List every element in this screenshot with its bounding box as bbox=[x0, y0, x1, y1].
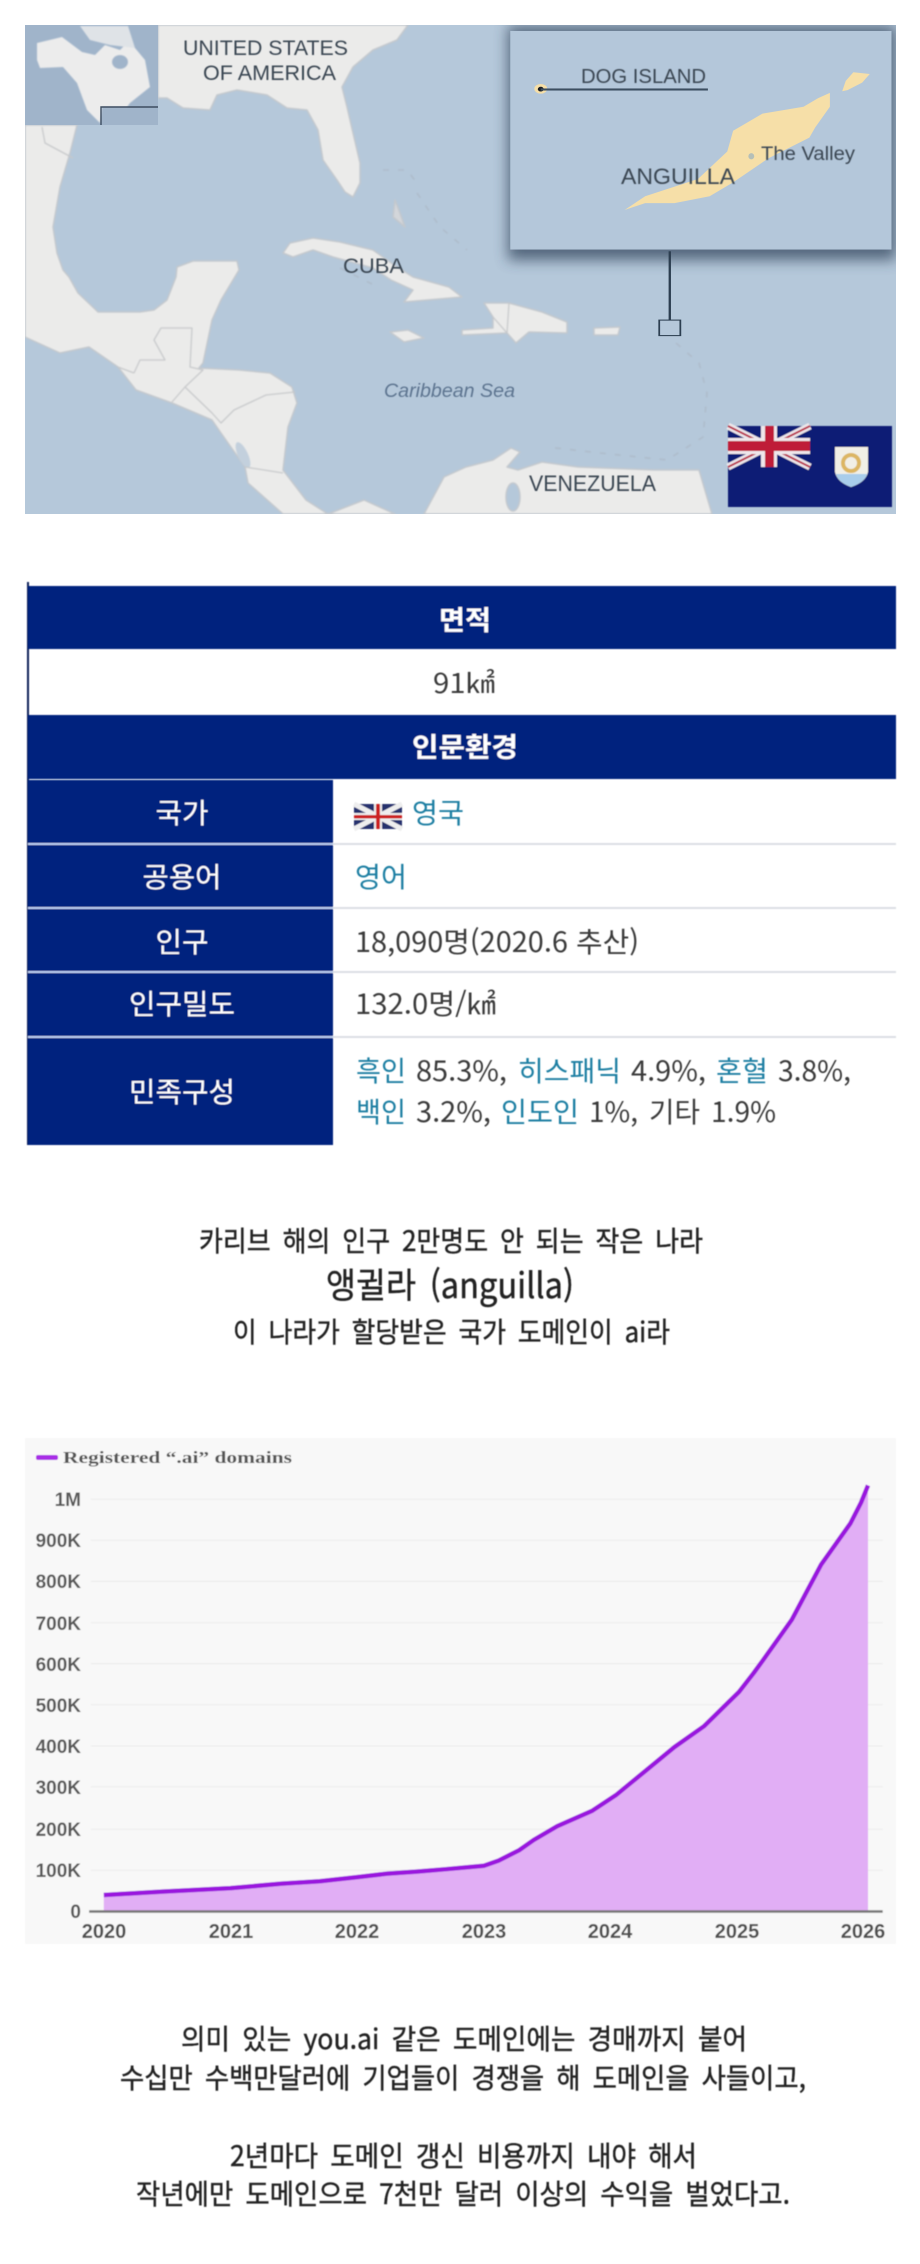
map labels: The Valley bbox=[761, 144, 856, 165]
row: population density: 132.0명/㎢ bbox=[355, 983, 496, 1023]
land masses bbox=[25, 25, 712, 514]
legend: Registered “.ai” domains bbox=[63, 1448, 292, 1467]
inset: Anguilla detail bbox=[510, 31, 891, 336]
x axis labels: 2024 bbox=[588, 1921, 633, 1943]
x axis labels: 2021 bbox=[209, 1921, 253, 1943]
row: ethnic composition: 85.3%, bbox=[416, 1050, 507, 1090]
row: ethnic composition bbox=[28, 1038, 851, 1145]
y axis labels: 600K bbox=[36, 1655, 81, 1676]
row: ethnic composition: 4.9%, bbox=[631, 1050, 706, 1090]
row: population density: 인구밀도 bbox=[129, 983, 235, 1023]
y axis labels: 200K bbox=[36, 1820, 81, 1841]
row: population bbox=[28, 909, 639, 971]
row: ethnic composition: 혼혈 bbox=[716, 1050, 768, 1090]
text block: closing caption: 2년마다 도메인 갱신 비용까지 내야 해서 bbox=[230, 2135, 697, 2175]
grid lines and area bbox=[89, 1485, 883, 1912]
map labels: ANGUILLA bbox=[621, 164, 735, 189]
map labels bbox=[183, 37, 856, 496]
heading: area: 면적 bbox=[439, 599, 491, 638]
text block: intro caption: 앵귈라 (anguilla) bbox=[326, 1258, 574, 1309]
row: ethnic composition: 흑인 bbox=[356, 1050, 406, 1090]
row: ethnic composition: 히스패닉 bbox=[518, 1050, 621, 1090]
x axis labels: 2026 bbox=[841, 1921, 885, 1943]
row: official language: 공용어 bbox=[142, 856, 222, 896]
y axis labels: 1M bbox=[55, 1490, 81, 1511]
x axis labels: 2022 bbox=[335, 1921, 379, 1943]
y axis labels bbox=[36, 1490, 81, 1923]
row: ethnic composition: 3.2%, bbox=[416, 1091, 491, 1131]
row: ethnic composition: 민족구성 bbox=[129, 1071, 235, 1111]
map labels: OF AMERICA bbox=[203, 62, 336, 85]
row: ethnic composition: 인도인 bbox=[501, 1091, 579, 1131]
row: ethnic composition: 백인 bbox=[356, 1091, 406, 1131]
map labels: CUBA bbox=[343, 255, 404, 278]
panel: registered .ai domains area chart bbox=[25, 1438, 896, 1944]
row: ethnic composition: 3.8%, bbox=[778, 1050, 851, 1090]
y axis labels: 400K bbox=[36, 1737, 81, 1758]
text block: closing caption: 수십만 수백만달러에 기업들이 경쟁을 해 도메인을 사들이고, bbox=[120, 2057, 806, 2097]
row: official language bbox=[28, 845, 407, 907]
row: population: 18,090명(2020.6 추산) bbox=[355, 921, 639, 961]
map labels: DOG ISLAND bbox=[581, 66, 706, 88]
row: population: 인구 bbox=[156, 921, 208, 961]
panel: facts table bbox=[27, 582, 896, 1145]
table frame rule bbox=[27, 582, 29, 1145]
text block: intro caption: 이 나라가 할당받은 국가 도메인이 ai라 bbox=[233, 1311, 670, 1351]
heading: area bbox=[28, 586, 896, 649]
row: country: 영국 bbox=[412, 792, 464, 832]
heading: human environment: 인문환경 bbox=[412, 726, 518, 765]
x axis labels: 2023 bbox=[462, 1921, 506, 1943]
heading: human environment bbox=[28, 715, 896, 779]
row: official language: 영어 bbox=[355, 856, 407, 896]
row: ethnic composition: 기타 bbox=[649, 1091, 700, 1131]
map labels: VENEZUELA bbox=[529, 471, 656, 496]
panel: map of the Caribbean bbox=[25, 25, 896, 514]
x axis labels bbox=[82, 1921, 885, 1943]
text block: closing caption bbox=[120, 2018, 806, 2213]
icon: Anguilla flag bbox=[728, 426, 892, 507]
row: ethnic composition: 1.9% bbox=[711, 1091, 776, 1131]
y axis labels: 500K bbox=[36, 1696, 81, 1717]
row: ethnic composition: 1%, bbox=[589, 1091, 638, 1131]
map labels: UNITED STATES bbox=[183, 37, 348, 60]
row: country: 국가 bbox=[156, 792, 208, 832]
text block: intro caption bbox=[199, 1220, 703, 1351]
y axis labels: 0 bbox=[70, 1902, 81, 1923]
y axis labels: 700K bbox=[36, 1614, 81, 1635]
y axis labels: 100K bbox=[36, 1861, 81, 1882]
row: population density bbox=[28, 973, 496, 1036]
y axis labels: 300K bbox=[36, 1778, 81, 1799]
text block: intro caption: 카리브 해의 인구 2만명도 안 되는 작은 나라 bbox=[199, 1220, 703, 1260]
text: area value: 91㎢ bbox=[433, 662, 495, 701]
text block: closing caption: 작년에만 도메인으로 7천만 달러 이상의 수익을 벌었다고. bbox=[136, 2173, 790, 2213]
map labels: Caribbean Sea bbox=[384, 381, 515, 402]
inset shadow bbox=[508, 26, 896, 260]
y axis labels: 800K bbox=[36, 1572, 81, 1593]
x axis labels: 2020 bbox=[82, 1921, 126, 1943]
inset: North America locator bbox=[25, 25, 158, 125]
y axis labels: 900K bbox=[36, 1531, 81, 1552]
text block: closing caption: 의미 있는 you.ai 같은 도메인에는 경매까지 붙어 bbox=[181, 2018, 747, 2058]
row: country bbox=[28, 780, 464, 843]
x axis labels: 2025 bbox=[715, 1921, 759, 1943]
